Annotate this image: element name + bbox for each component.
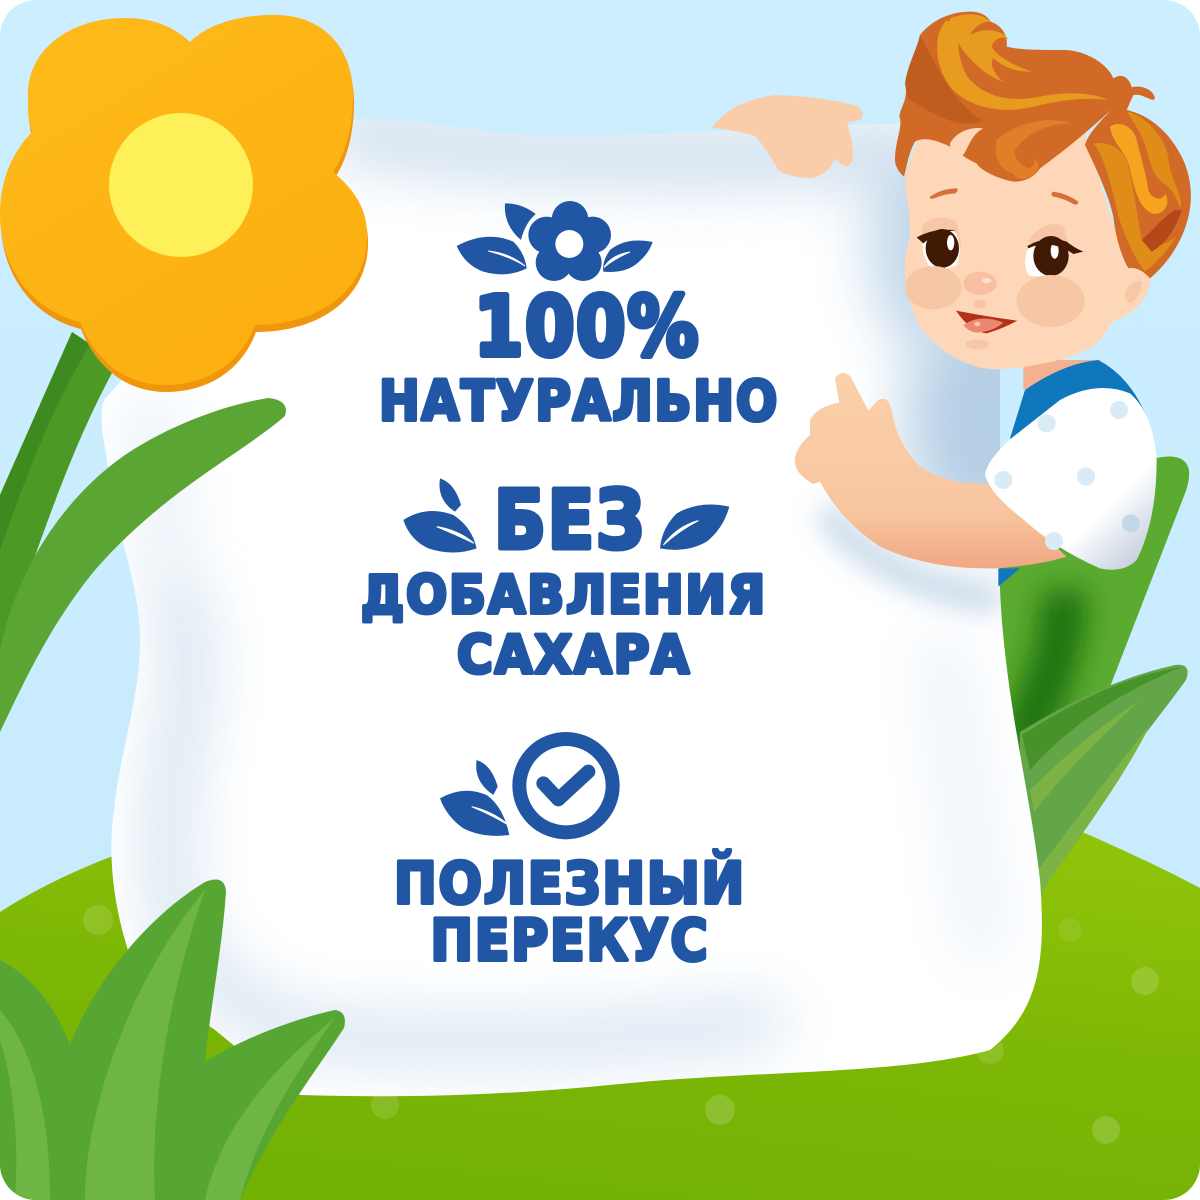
neck xyxy=(1023,360,1100,390)
text: snack: ПЕРЕКУС xyxy=(430,908,710,974)
ear xyxy=(1125,281,1142,303)
white cloth sheet xyxy=(102,119,1075,1096)
text: added: ДОБАВЛЕНИЯ xyxy=(361,565,767,626)
boy head xyxy=(895,12,1191,369)
left eye xyxy=(917,229,960,269)
heading: without: БЕЗ xyxy=(494,474,646,568)
heading: natural: НАТУРАЛЬНО xyxy=(379,369,779,433)
icon: left leaves xyxy=(403,478,477,552)
nose xyxy=(963,272,997,295)
eye lids xyxy=(922,218,1068,246)
hair xyxy=(895,12,1191,278)
mouth xyxy=(956,311,1017,333)
face xyxy=(905,117,1151,369)
blue vest xyxy=(998,360,1147,587)
sleeve xyxy=(985,388,1157,570)
boy body and arm xyxy=(795,360,1157,587)
front leaf on the right xyxy=(1020,665,1188,900)
eyebrows xyxy=(930,188,1078,205)
icon: check circle with leaves xyxy=(440,739,613,836)
cheeks xyxy=(905,266,962,309)
text: healthy: ПОЛЕЗНЫЙ xyxy=(394,849,746,917)
flower centre xyxy=(109,113,253,257)
sleeve dots xyxy=(994,401,1140,550)
icon: flower with leaves xyxy=(457,201,653,281)
green hill xyxy=(0,832,1200,1200)
text: sugar: САХАРА xyxy=(457,625,691,686)
stem and long leaf on the left xyxy=(0,332,286,732)
heading: 100%: 100% xyxy=(474,280,700,375)
grass bottom left xyxy=(0,880,345,1200)
right eye xyxy=(1025,236,1083,277)
arm with pointing hand xyxy=(795,373,1067,568)
back leaf on the right xyxy=(1000,456,1190,896)
big yellow flower xyxy=(0,15,368,392)
top hand holding sheet xyxy=(712,95,863,178)
icon: right leaf xyxy=(660,504,729,550)
